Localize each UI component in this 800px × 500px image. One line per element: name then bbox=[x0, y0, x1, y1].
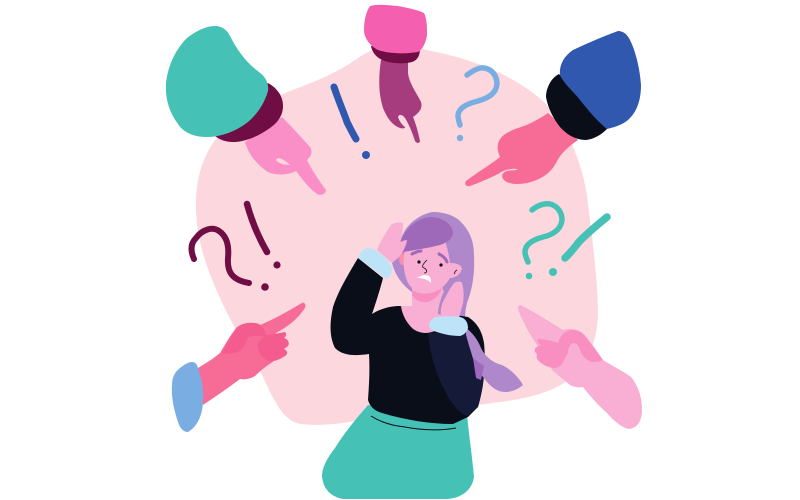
left cuff bbox=[358, 248, 392, 279]
hand: lower-right pink bbox=[518, 305, 642, 429]
question mark and exclamation: maroon bbox=[192, 204, 281, 291]
question mark: sky blue bbox=[457, 68, 497, 141]
background pink blob bbox=[196, 46, 598, 425]
braid shade bbox=[473, 358, 484, 380]
hand: lower-left sky sleeve bbox=[172, 303, 305, 432]
sweater bbox=[331, 258, 485, 424]
question mark and exclamation: teal bbox=[525, 204, 607, 279]
hair fringe bbox=[400, 217, 453, 252]
skirt bbox=[322, 405, 474, 499]
woman figure bbox=[322, 212, 523, 499]
hair lock on cheek bbox=[438, 278, 465, 316]
face bbox=[404, 235, 462, 293]
hand on cheek bbox=[441, 282, 464, 318]
eyes bbox=[417, 260, 421, 264]
hair back bbox=[392, 212, 474, 335]
mouth bbox=[417, 275, 431, 283]
exclamation mark: blue bbox=[334, 87, 370, 159]
braid bbox=[466, 328, 523, 392]
nose and ear lines bbox=[423, 260, 457, 274]
navy sleeve bbox=[428, 333, 484, 416]
hand: top-right blue sleeve bbox=[465, 31, 641, 186]
ear blush bbox=[399, 253, 405, 265]
hand: top magenta sleeve bbox=[364, 5, 427, 143]
neck bbox=[401, 285, 460, 333]
eyebrows bbox=[412, 251, 447, 262]
raised hand bbox=[377, 222, 407, 263]
hand: top-left teal sleeve bbox=[166, 26, 326, 195]
right cuff bbox=[429, 316, 468, 336]
waist crease bbox=[371, 416, 456, 430]
chin shadow bbox=[412, 288, 442, 302]
